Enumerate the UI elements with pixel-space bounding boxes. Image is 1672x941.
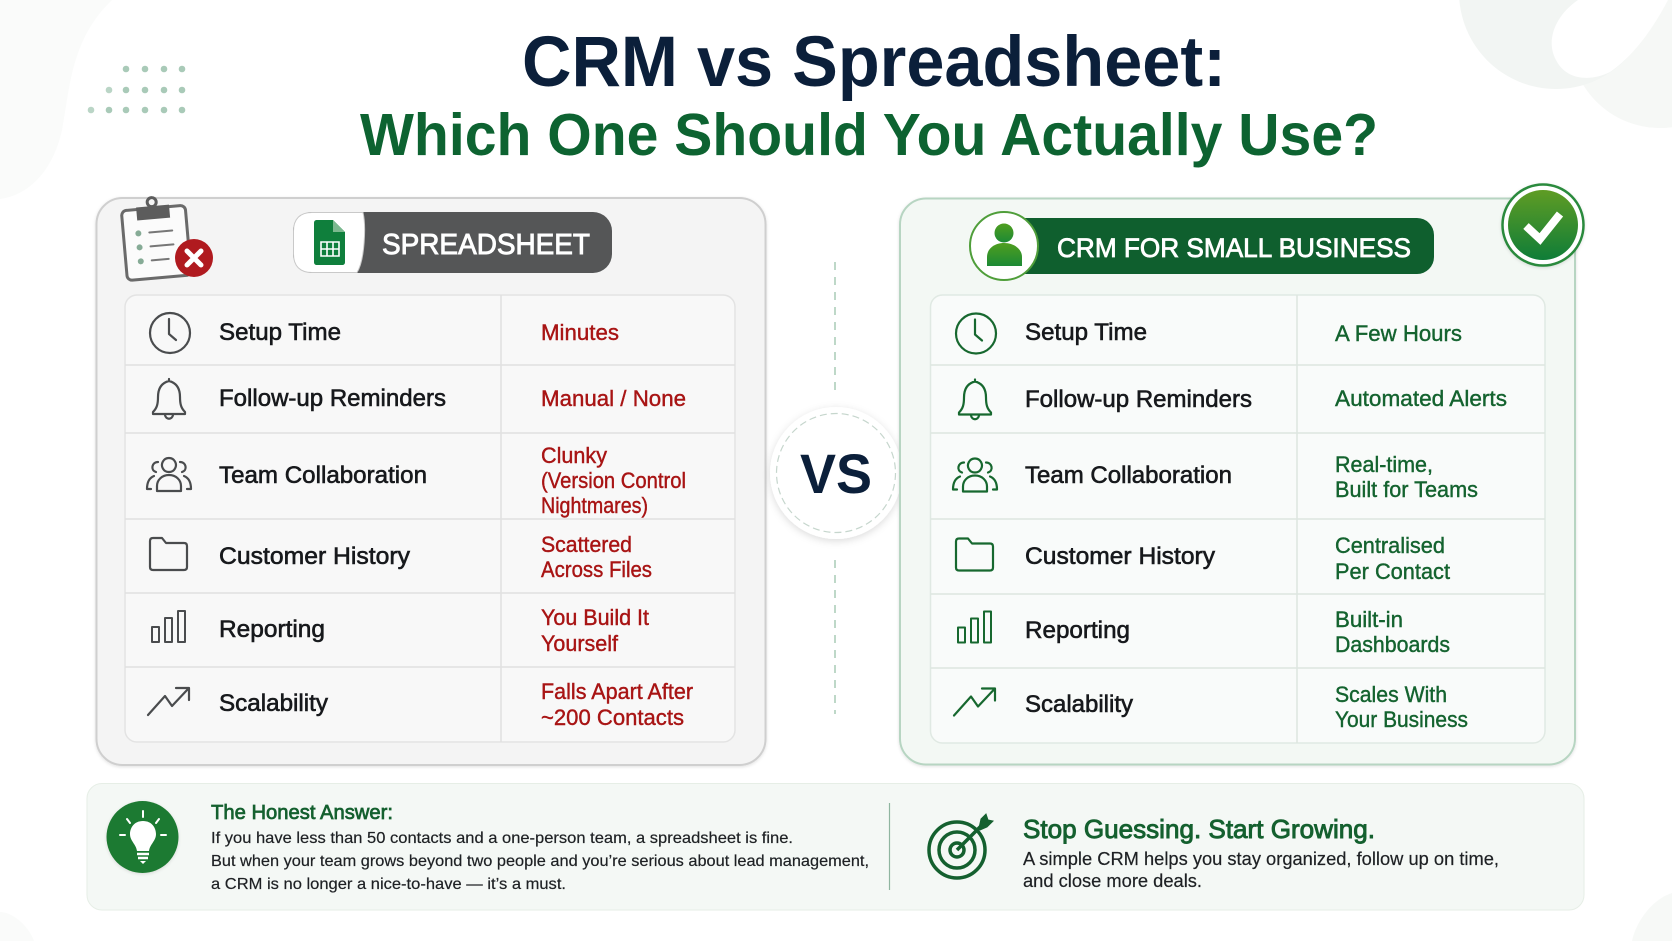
row values: crm: Real-time, (1335, 452, 1433, 477)
dot grid decoration (88, 66, 185, 113)
title (360, 23, 1378, 168)
row labels: spreadsheet: Reporting (219, 616, 325, 643)
text: stop guessing: and close more deals. (1023, 871, 1202, 891)
row values: crm: Centralised (1335, 533, 1445, 558)
title: CRM vs Spreadsheet: (522, 23, 1226, 102)
row labels: crm: Customer History (1025, 543, 1215, 570)
row icons: crm (953, 314, 997, 716)
row values: crm: A Few Hours (1335, 321, 1462, 346)
text: the honest answer: But when your team grows beyond two people and you’re serious about lead management, (211, 853, 869, 870)
icon: google sheets (314, 220, 345, 265)
row values: spreadsheet: Manual / None (541, 386, 686, 411)
vs divider line (834, 255, 836, 714)
background decoration: top right circles (1459, 0, 1672, 128)
row labels: crm (1025, 319, 1252, 718)
badge: crm for small business (970, 212, 1434, 280)
row values: spreadsheet: You Build It (541, 605, 649, 630)
badge: spreadsheet: SPREADSHEET (382, 229, 590, 261)
badge: spreadsheet (293, 212, 612, 273)
row values: spreadsheet: Yourself (541, 631, 619, 656)
text: the honest answer: a CRM is no longer a nice-to-have — it’s a must. (211, 876, 566, 893)
row values: crm: Per Contact (1335, 559, 1450, 584)
icon: light bulb (106, 801, 178, 873)
text: the honest answer: The Honest Answer: (211, 802, 393, 824)
row labels: spreadsheet: Setup Time (219, 319, 341, 346)
background decoration: top left blob (0, 0, 112, 199)
vs badge: VS (800, 442, 872, 505)
row labels: spreadsheet: Follow-up Reminders (219, 385, 446, 412)
row values: crm: Built for Teams (1335, 477, 1478, 502)
row values: crm: Dashboards (1335, 632, 1450, 657)
text: stop guessing (1023, 814, 1499, 891)
row values: spreadsheet (541, 320, 693, 730)
row labels: spreadsheet (219, 319, 446, 717)
row values: spreadsheet: Falls Apart After (541, 679, 693, 704)
comparison table: crm (930, 295, 1545, 743)
row values: spreadsheet: Across Files (541, 557, 652, 582)
row labels: spreadsheet: Team Collaboration (219, 462, 427, 489)
row values: crm: Automated Alerts (1335, 386, 1507, 411)
row icons: spreadsheet (147, 313, 191, 715)
row values: crm: Your Business (1335, 707, 1468, 732)
row values: crm: Built-in (1335, 607, 1403, 632)
row values: spreadsheet: Clunky (541, 443, 607, 468)
row labels: crm: Scalability (1025, 691, 1133, 718)
vs badge (770, 407, 902, 539)
row values: spreadsheet: ~200 Contacts (541, 705, 684, 730)
row labels: crm: Setup Time (1025, 319, 1147, 346)
icon: green check badge (1502, 184, 1584, 266)
panel: bottom summary (87, 784, 1584, 910)
row values: spreadsheet: Minutes (541, 320, 619, 345)
text: the honest answer (211, 802, 869, 893)
badge: crm for small business: CRM FOR SMALL BUSINESS (1057, 233, 1411, 263)
background decoration: bottom corners (0, 893, 1672, 941)
row labels: crm: Reporting (1025, 617, 1130, 644)
text: stop guessing: Stop Guessing. Start Growing. (1023, 814, 1375, 844)
row labels: crm: Follow-up Reminders (1025, 386, 1252, 413)
icon: clipboard with red cross (120, 195, 213, 281)
comparison table: spreadsheet (125, 295, 735, 742)
row values: spreadsheet: (Version Control (541, 468, 686, 493)
title: Which One Should You Actually Use? (360, 102, 1378, 168)
text: the honest answer: If you have less than 50 contacts and a one-person team, a spreadsheet is fine. (211, 830, 793, 847)
row values: spreadsheet: Nightmares) (541, 493, 648, 518)
row labels: crm: Team Collaboration (1025, 462, 1232, 489)
text: stop guessing: A simple CRM helps you stay organized, follow up on time, (1023, 849, 1499, 869)
panel: spreadsheet (96, 195, 766, 765)
row labels: spreadsheet: Customer History (219, 543, 410, 570)
row values: spreadsheet: Scattered (541, 532, 632, 557)
row values: crm: Scales With (1335, 682, 1447, 707)
panel: crm (900, 184, 1584, 764)
icon: person (987, 224, 1022, 266)
row labels: spreadsheet: Scalability (219, 690, 328, 717)
row values: crm (1335, 321, 1507, 732)
icon: target with arrow (929, 814, 993, 878)
